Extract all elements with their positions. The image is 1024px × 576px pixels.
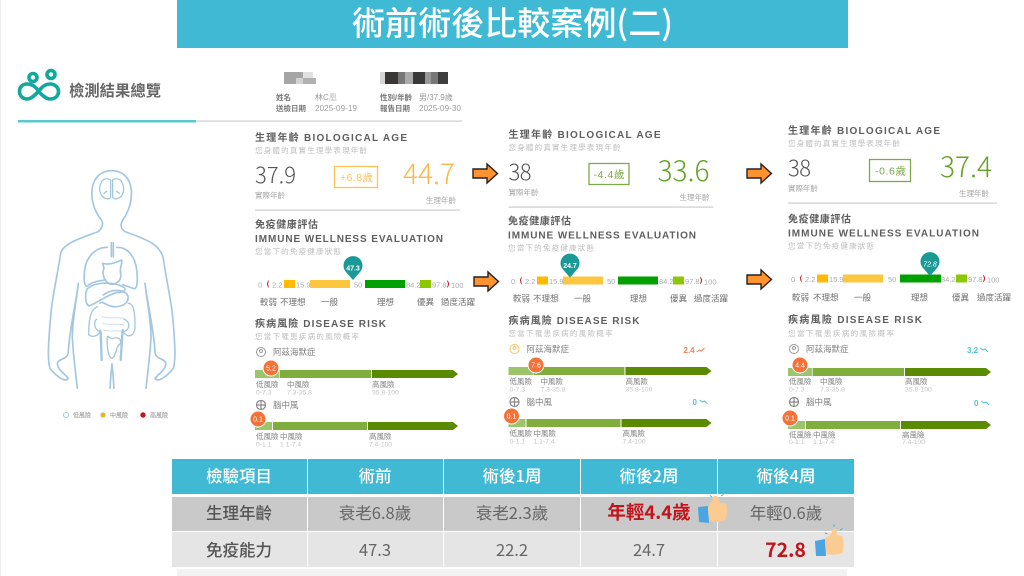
immune scale bar: 0 bbox=[791, 275, 795, 284]
immune scale bar: 15.9 bbox=[549, 277, 564, 286]
immune scale bar bbox=[258, 280, 464, 290]
risk bar: alzheimer: 35.8-100 bbox=[372, 390, 399, 396]
table row: biological age: 生理年齡 bbox=[206, 500, 272, 524]
risk bar: stroke bbox=[250, 411, 458, 448]
panel: biological age, pre-op bbox=[255, 131, 460, 211]
table header row: 術後1周 bbox=[483, 463, 541, 487]
body outline bbox=[48, 171, 175, 388]
panel: disease risk, week 2: 您當下罹患疾病的風險概率 bbox=[508, 328, 613, 338]
table header row: 術後2周 bbox=[620, 463, 678, 487]
panel: immune wellness, week 4: 免疫健康評估 bbox=[788, 212, 851, 226]
panel: biological age, pre-op: 實際年齡 bbox=[255, 190, 285, 200]
arrow: biological age pre-op to week 2 bbox=[473, 164, 498, 183]
panel: disease risk, week 2 bbox=[504, 314, 712, 446]
immune scale labels: 理想 bbox=[377, 297, 395, 307]
risk bar: alzheimer: 7.3-35.8 bbox=[820, 386, 845, 394]
immune scale bar: 2.2 bbox=[272, 280, 282, 290]
heart bbox=[103, 260, 122, 284]
icon: stroke brain bbox=[256, 400, 266, 410]
trend: 2.4 up: 2.4 bbox=[684, 346, 695, 355]
table row: immune: 22.2 bbox=[496, 537, 528, 561]
immune scale bar: 0 bbox=[258, 280, 262, 290]
marker pin 24.7: 24.7 bbox=[563, 263, 577, 270]
risk bar: stroke: 0-1.1 bbox=[256, 442, 272, 448]
immune scale bar: 15.9 bbox=[829, 275, 844, 284]
overview heading: 檢測結果總覽 bbox=[69, 82, 161, 100]
lungs and trachea bbox=[84, 243, 137, 289]
panel: biological age, week 2: 實際年齡 bbox=[508, 187, 539, 197]
table row: biological age: 衰老2.3歲 bbox=[476, 500, 548, 524]
icon: thumbs up, week 2 bbox=[698, 490, 727, 523]
patient info header bbox=[240, 72, 462, 122]
brain bbox=[100, 179, 124, 199]
risk bar: stroke: 中風險 bbox=[280, 431, 303, 441]
risk bar: stroke: 0-1.1 bbox=[789, 439, 805, 446]
panel: biological age, week 4: 37.4 bbox=[940, 146, 992, 186]
risk bar: stroke: 7.4-100 bbox=[369, 442, 392, 448]
panel: immune wellness, pre-op: IMMUNE WELLNESS EVALUATION bbox=[255, 234, 443, 245]
risk bar: stroke: 高風險 bbox=[369, 431, 392, 441]
panel: biological age, week 4 bbox=[788, 124, 997, 204]
panel: biological age, week 2: 38 bbox=[508, 155, 532, 187]
immune scale bar: 50 bbox=[888, 275, 896, 284]
liver and stomach bbox=[86, 283, 128, 307]
bottom strip bbox=[177, 569, 847, 576]
risk bar: alzheimer: 低風險 bbox=[510, 376, 532, 386]
panel: immune wellness, week 2: 免疫健康評估 bbox=[508, 214, 571, 228]
immune scale bar: 84.2 bbox=[406, 280, 421, 290]
icon: brain head bbox=[790, 344, 798, 354]
arrow: immune week 2 to week 4 bbox=[747, 270, 772, 289]
icon: brain head bbox=[510, 344, 519, 354]
body legend: 中風險 bbox=[110, 412, 128, 420]
arrow: immune pre-op to week 2 bbox=[474, 272, 498, 291]
panel: biological age, week 2: 您身體的真實生理學表現年齡 bbox=[508, 142, 621, 152]
risk bar: stroke: 低風險 bbox=[256, 431, 279, 441]
immune scale bar bbox=[791, 274, 1000, 284]
patient info header: 林C凰 bbox=[315, 92, 337, 102]
immune scale labels: 理想 bbox=[630, 294, 648, 304]
risk bar: stroke bbox=[782, 410, 991, 446]
risk bar: alzheimer: 4.4 bbox=[795, 362, 805, 370]
trend: 0 down bbox=[692, 398, 708, 407]
risk bar: stroke: 高風險 bbox=[902, 430, 925, 440]
panel: disease risk, week 4: 疾病風險 DISEASE RISK bbox=[788, 313, 923, 326]
risk bar: stroke: 低風險 bbox=[510, 428, 532, 438]
table row: biological age: 年輕4.4歲 bbox=[607, 499, 691, 525]
table row: immune bbox=[172, 532, 854, 567]
trend: 3.2 down: 3.2 bbox=[967, 346, 979, 355]
immune scale labels: 不理想 bbox=[813, 292, 839, 302]
panel: disease risk, pre-op: 阿茲海默症 bbox=[273, 347, 316, 357]
panel: immune wellness, week 2: IMMUNE WELLNESS EVALUATION bbox=[508, 230, 696, 242]
icon: stroke brain bbox=[790, 397, 798, 407]
risk bar: stroke: 0.1 bbox=[785, 416, 795, 422]
risk bar: stroke: 1.1-7.4 bbox=[813, 439, 834, 446]
comparison table bbox=[172, 459, 854, 567]
panel: biological age, week 4: 38 bbox=[788, 151, 811, 183]
risk bar: alzheimer: 0-7.3 bbox=[510, 386, 525, 394]
immune scale labels: 一般 bbox=[854, 292, 872, 302]
risk bar: alzheimer: 5.2 bbox=[266, 366, 276, 372]
table row: biological age: 年輕0.6歲 bbox=[750, 500, 822, 524]
panel: biological age, pre-op: 生理年齡 bbox=[426, 195, 456, 205]
title banner bbox=[177, 0, 848, 48]
panel: disease risk, week 4 bbox=[782, 313, 991, 446]
table row: immune: 免疫能力 bbox=[206, 537, 272, 561]
immune scale bar: 2.2 bbox=[805, 275, 815, 284]
panel: disease risk, pre-op: 您當下罹患疾病的風險概率 bbox=[255, 331, 360, 341]
trend: 0 down bbox=[974, 399, 989, 408]
panel: immune wellness, pre-op: 免疫健康評估 bbox=[255, 218, 318, 231]
marker pin 47.3 bbox=[344, 256, 362, 280]
risk bar: stroke bbox=[504, 408, 712, 446]
patient info header: 2025-09-30 bbox=[419, 104, 462, 113]
risk bar: alzheimer: 低風險 bbox=[789, 376, 812, 386]
risk bar: stroke: 中風險 bbox=[813, 430, 836, 440]
patient info header: 報告日期 bbox=[380, 103, 410, 113]
table row: immune: 24.7 bbox=[633, 537, 665, 561]
marker pin 24.7 bbox=[560, 254, 580, 278]
risk bar: stroke: 中風險 bbox=[534, 428, 556, 438]
table row: immune: 47.3 bbox=[359, 537, 391, 561]
panel: immune wellness, week 2: 您當下的免疫健康狀態 bbox=[508, 242, 594, 252]
table header row: 術後4周 bbox=[757, 463, 815, 487]
patient info header: 送檢日期 bbox=[276, 103, 306, 113]
risk bar: alzheimer: 0-7.3 bbox=[256, 390, 272, 396]
immune scale bar: 97.8 bbox=[432, 280, 447, 290]
panel: biological age, week 2: 生理年齡 bbox=[680, 192, 710, 202]
panel: biological age, pre-op: 您身體的真實生理學表現年齡 bbox=[255, 145, 368, 155]
risk bar: stroke: 1.1-7.4 bbox=[534, 438, 555, 446]
risk bar: alzheimer: 低風險 bbox=[256, 379, 279, 389]
panel: disease risk, pre-op bbox=[250, 317, 458, 448]
immune scale labels: 過度活躍 bbox=[441, 297, 476, 307]
immune scale bar: 84.2 bbox=[941, 275, 956, 284]
panel: immune wellness, pre-op bbox=[255, 218, 476, 307]
risk bar: stroke: 7.4-100 bbox=[622, 438, 646, 446]
panel: disease risk, week 2: 腦中風 bbox=[526, 397, 553, 407]
patient info header: 性別/年齡 bbox=[380, 92, 413, 102]
icon: brain head bbox=[256, 348, 266, 356]
risk bar: stroke: 高風險 bbox=[622, 428, 645, 438]
immune scale labels: 不理想 bbox=[533, 294, 559, 304]
immune scale labels: 一般 bbox=[321, 297, 339, 307]
table row: biological age: 衰老6.8歲 bbox=[339, 500, 411, 524]
icon: human body anatomy bbox=[48, 171, 175, 388]
risk bar: alzheimer: 中風險 bbox=[820, 376, 843, 386]
panel: disease risk, pre-op: 腦中風 bbox=[273, 400, 299, 410]
immune scale bar: 0 bbox=[511, 277, 515, 286]
panel: disease risk, week 4: 您當下罹患疾病的風險概率 bbox=[788, 328, 894, 338]
panel: immune wellness, pre-op: 您當下的免疫健康狀態 bbox=[255, 246, 342, 256]
arrow: biological age week 2 to week 4 bbox=[747, 164, 772, 183]
immune scale labels: 不理想 bbox=[280, 297, 306, 307]
panel: biological age, pre-op: 生理年齡 BIOLOGICAL AGE bbox=[255, 131, 407, 144]
immune scale labels: 理想 bbox=[911, 292, 929, 302]
risk bar: stroke: 7.4-100 bbox=[902, 439, 925, 446]
panel: biological age, week 2: 生理年齡 BIOLOGICAL AGE bbox=[508, 128, 661, 141]
table row: biological age bbox=[172, 497, 854, 531]
immune scale bar: 97.8 bbox=[968, 275, 983, 284]
risk bar: alzheimer: 高風險 bbox=[626, 376, 648, 386]
panel: biological age, week 4: 實際年齡 bbox=[788, 183, 818, 193]
immune scale labels: 較弱 bbox=[513, 294, 530, 304]
risk bar: alzheimer: 高風險 bbox=[905, 376, 928, 386]
immune scale labels: 一般 bbox=[574, 294, 592, 304]
panel: immune wellness, week 4 bbox=[788, 212, 1012, 302]
panel: disease risk, pre-op: 疾病風險 DISEASE RISK bbox=[255, 317, 387, 330]
logo icon bbox=[20, 70, 58, 99]
immune scale bar: 100 bbox=[451, 281, 464, 290]
risk bar: stroke: 0.1 bbox=[253, 416, 263, 424]
panel: disease risk, week 4: 腦中風 bbox=[806, 397, 832, 407]
panel: disease risk, week 2: 阿茲海默症 bbox=[526, 344, 570, 354]
risk bar: alzheimer: 7.3-35.8 bbox=[287, 390, 312, 396]
immune scale bar: 100 bbox=[987, 276, 1000, 284]
immune scale labels: 過度活躍 bbox=[977, 292, 1012, 302]
immune scale labels: 較弱 bbox=[792, 292, 809, 302]
patient info header: 男/37.9歲 bbox=[419, 92, 453, 102]
panel: immune wellness, week 4: 您當下的免疫健康狀態 bbox=[788, 240, 874, 250]
risk bar: alzheimer: 中風險 bbox=[540, 376, 563, 386]
icon: thumbs up, week 4 bbox=[815, 524, 844, 556]
panel: biological age, pre-op: 37.9 bbox=[255, 158, 296, 190]
panel: biological age, week 4: 生理年齡 bbox=[959, 188, 989, 198]
immune scale labels: 較弱 bbox=[260, 297, 277, 307]
risk bar: alzheimer bbox=[508, 357, 712, 394]
body legend: 高風險 bbox=[150, 412, 168, 420]
immune scale labels bbox=[513, 294, 729, 304]
trend: 2.4 up bbox=[684, 346, 704, 355]
panel: biological age, week 4: 您身體的真實生理學表現年齡 bbox=[788, 138, 900, 148]
immune scale labels bbox=[792, 292, 1012, 302]
panel: immune wellness, week 2 bbox=[508, 214, 729, 304]
blurred name mosaic bbox=[284, 72, 316, 84]
risk bar: alzheimer: 7.3-35.8 bbox=[540, 386, 566, 394]
risk bar: alzheimer: 中風險 bbox=[287, 379, 310, 389]
panel: biological age, pre-op: 44.7 bbox=[403, 153, 455, 193]
risk bar: stroke: 0-1.1 bbox=[510, 438, 525, 446]
risk bar: stroke: 1.1-7.4 bbox=[280, 442, 301, 448]
panel: biological age, week 4: 生理年齡 BIOLOGICAL AGE bbox=[788, 124, 940, 137]
marker pin 72.8 bbox=[920, 252, 940, 276]
immune scale labels: 優異 bbox=[952, 292, 970, 302]
immune scale labels: 優異 bbox=[417, 297, 435, 307]
risk bar: alzheimer: 35.8-100 bbox=[626, 386, 653, 394]
trend: 0 down: 0 bbox=[974, 399, 979, 408]
immune scale bar: 97.8 bbox=[685, 277, 700, 286]
intestines bbox=[89, 303, 135, 360]
panel: biological age, week 2: 33.6 bbox=[658, 150, 710, 190]
immune scale bar bbox=[511, 276, 717, 286]
risk bar: alzheimer bbox=[788, 357, 991, 394]
risk bar: alzheimer: 高風險 bbox=[372, 379, 395, 389]
panel: immune wellness, week 4: IMMUNE WELLNESS EVALUATION bbox=[788, 228, 979, 240]
immune scale bar: 84.2 bbox=[659, 277, 674, 286]
immune scale bar: 15.9 bbox=[296, 280, 311, 290]
risk bar: alzheimer: 0-7.3 bbox=[789, 386, 805, 394]
table row: immune: 72.8 bbox=[765, 534, 806, 563]
patient info header: 2025-09-19 bbox=[315, 104, 358, 113]
body legend bbox=[64, 412, 168, 420]
panel: biological age, week 4: -0.6歲 bbox=[875, 164, 906, 178]
table header row: 術前 bbox=[358, 463, 392, 487]
icon: stroke brain bbox=[510, 397, 519, 407]
immune scale bar: 50 bbox=[607, 277, 615, 286]
trend: 0 down: 0 bbox=[692, 398, 698, 407]
immune scale bar: 100 bbox=[704, 278, 717, 286]
immune scale labels: 優異 bbox=[670, 294, 688, 304]
marker pin 72.8: 72.8 bbox=[923, 262, 937, 268]
panel: disease risk, week 4: 阿茲海默症 bbox=[806, 344, 849, 354]
immune scale labels bbox=[260, 297, 476, 307]
panel: biological age, week 2 bbox=[508, 128, 714, 208]
immune scale labels: 過度活躍 bbox=[694, 294, 729, 304]
table header row bbox=[172, 459, 854, 494]
risk bar: alzheimer bbox=[255, 360, 458, 396]
immune scale bar: 2.2 bbox=[525, 277, 535, 286]
blurred id mosaic bbox=[380, 72, 448, 84]
panel: biological age, week 2: -4.4歲 bbox=[594, 168, 624, 181]
trend: 3.2 down bbox=[967, 346, 988, 355]
panel: disease risk, week 2: 疾病風險 DISEASE RISK bbox=[508, 314, 640, 327]
immune scale bar: 50 bbox=[354, 280, 362, 290]
table header row: 檢驗項目 bbox=[206, 463, 272, 487]
panel: biological age, pre-op: +6.8歲 bbox=[340, 171, 373, 184]
heading underline bbox=[18, 120, 240, 122]
marker pin 47.3: 47.3 bbox=[346, 266, 360, 272]
patient info header: 姓名 bbox=[276, 92, 291, 102]
risk bar: alzheimer: 7.6 bbox=[531, 362, 541, 370]
body legend: 低風險 bbox=[73, 412, 91, 420]
risk bar: stroke: 低風險 bbox=[789, 430, 812, 440]
risk bar: stroke: 0.1 bbox=[507, 414, 516, 420]
risk bar: alzheimer: 35.8-100 bbox=[905, 386, 932, 394]
